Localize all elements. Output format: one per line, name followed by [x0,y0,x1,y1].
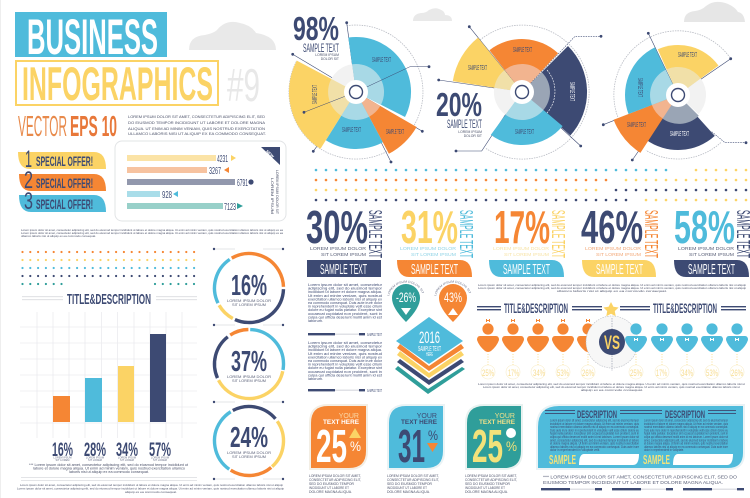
stat: 30%: SAMPLE TEXT [320,261,367,278]
fine print: top left: Lorem ipsum dolor sit amet, consectetur adipiscing elit, sed do eiusmod tempor incididunt ut labore et dolore magna aliqua. Ut enim ad minim veniam, quis nostrud exercitation ullamco laboris nisi ut aliquip ex ea [21,231,283,235]
card: blue 31: % [428,427,438,443]
panel: description: culpa qui officia deserunt mollit anim id est laborum. Lorem ipsum dolor sit [550,435,639,439]
panel: description: SAMPLE [549,452,576,467]
fine print: below stats [478,283,746,293]
chart footnote: labore et dolore magna aliqua. Ut enim ad minim veniam, quis nostrud exercitation ullamco [33,466,185,470]
heading: title and description left: TITLE&DESCRIPTION [504,301,568,316]
card: orange 25: 25 [316,420,347,472]
text column: laborum. [308,319,323,323]
text column: SAMPLE TEXT [367,388,382,393]
chart footnote: laboris nisi ut aliquip ex ea commodo consequat. [69,470,149,474]
card text 1: SED DO EIUSMOD TEMPOR [309,482,355,486]
card text 1: DOLORE MAGNA ALIQUA. [309,490,352,494]
title: infographics: INFOGRAPHICS [22,57,213,110]
text column: ea commodo consequat. Duis aute irure dolor [308,359,383,363]
bar chart: 34% [116,440,138,461]
ring: 24%: LOREM IPSUM DOLOR [227,451,271,455]
fine print: below stats: Lorem ipsum dolor sit amet, consectetur adipiscing elit, sed do eiusmod tempor incididunt ut labore et dolore magna aliqua. Ut enim ad minim veniam, quis nostrud exercitation ullamco laboris nisi ut aliquip [478,283,746,287]
pie 2 heading [436,86,482,138]
fine print: bottom left: Lorem ipsum dolor sit amet, consectetur adipiscing elit, sed do eiusmod tempor incididunt ut labore et dolore magna aliqua. Ut enim ad minim veniam, quis nostrud exercitation ullamco laboris nisi ut aliquip [20,483,283,487]
text column: exercitation ullamco laboris nisi ut aliquip ex [308,355,382,359]
stat: 30%: LOREM IPSUM DOLOR [310,246,366,251]
layered diamond: HERE [426,352,433,358]
orange figures row [477,319,599,379]
pie chart 2: SAMPLE TEXT [568,82,577,101]
text: SAMPLE TEXT [303,41,339,55]
dot rows: top right [316,170,750,200]
bar chart [20,312,197,462]
panel: description: dolor in reprehenderit in voluptate. [644,448,684,452]
card text 3: DOLORE MAGNA ALIQUA. [465,490,508,494]
special offers: 1 [25,146,32,173]
intro text: DO EIUSMOD TEMPOR INCIDIDUNT UT LABORE ET DOLORE MAGNA [128,121,266,125]
fine print: versus: Lorem ipsum dolor sit amet, consectetur adipiscing elit, sed do eiusmod tempor incididunt ut labore et dolore magna aliqua. Ut enim ad minim veniam, quis nostrud exercitation ullamco laboris nisi ut [478,382,745,386]
pie chart 2 [437,25,602,159]
fine print: bottom left [17,483,284,494]
text column: ea commodo consequat. Duis aute irure dolor [308,301,383,305]
text column: Ut enim ad minim veniam, quis nostrud [308,352,382,356]
heading: title and description left [477,301,602,316]
text: EPS 10 [70,111,117,143]
text column: incididunt ut labore et dolore magna aliqua. [308,290,382,294]
layered diamond: 2016 [419,328,440,347]
stat: 31%: 31% [401,201,458,253]
intro text: ULLAMCO LABORIS NISI UT ALIQUIP EX EA COMMODO CONSEQUAT. [128,132,266,136]
card text 2: DOLORE MAGNA ALIQUA. [387,490,430,494]
text column: in reprehenderit in voluptate velit esse cillum [308,305,382,309]
title: business: BUSINESS [27,9,158,65]
panel: description: dolor in reprehenderit in voluptate velit. [550,448,600,452]
description footnote: *** LOREM IPSUM DOLOR SIT AMET, CONSECTETUR ADIPISCING ELIT, SED DO [543,474,737,480]
fine print: below stats: ullamco laboris nisi ut aliquip ex ea commodo consequat. [557,289,667,293]
intro text: LOREM IPSUM DOLOR SIT AMET, CONSECTETUR ADIPISCING ELIT, SED [128,115,266,119]
special offers [18,146,106,215]
ring: 16% [202,241,296,335]
pie 1 heading: LOREM IPSUM [315,53,339,57]
card text 1: CONSECTETUR ADIPISCING ELIT, [309,478,361,482]
text column: occaecat cupidatat non proident, sunt in [308,312,382,316]
panel: horizontal bars: 7123 [224,202,236,213]
ring: 16%: 16% [231,270,267,302]
stat: 30%: 30% [306,201,368,253]
vs badge: VS [604,333,620,354]
text column: culpa qui officia deserunt mollit anim id est [308,373,382,377]
dot rows: left [22,252,197,284]
card: orange 25: YOUR [339,413,359,420]
panel: description: fugiat nulla pariatur. Excepteur sint occaecat cupidatat non proident, sunt in [550,432,639,436]
pie chart 3 [602,31,747,161]
text column: exercitation ullamco laboris nisi ut aliquip ex [308,297,382,301]
stat: 17% [489,201,568,278]
pie chart 3: SAMPLE TEXT [636,78,645,97]
text column [308,283,383,393]
card: blue 31: YOUR [417,413,437,420]
text column: culpa qui officia deserunt mollit anim id est [308,315,382,319]
fine print: versus: Lorem ipsum dolor sit amet, consectetur adipiscing elit, sed do eiusmod tempor incididunt ut labore et dolore magna aliqua. Ut enim ad minim veniam, quis nostrud exercitation ullamco laboris nisi ut [483,385,740,389]
pie chart 2: SAMPLE TEXT [513,45,532,54]
fine print: bottom left: aliquip ex ea commodo consequat. [125,490,177,494]
panel: horizontal bars: 3267 [209,166,221,177]
stat: 30%: SIT LOREM IPSUM [321,252,366,257]
panel: description: amet, consectetur adipiscing elit, sed do eiusmod tempor incididunt ut labore [550,438,639,442]
fine print: versus [478,382,745,392]
card: teal 25: YOUR [495,413,515,420]
special offers: 2 [24,167,33,194]
pie chart 2: SAMPLE TEXT [468,63,487,72]
card: teal 25 [466,405,522,472]
text column: in reprehenderit in voluptate velit esse cillum [308,363,382,367]
blue figures row: 53% [706,368,718,378]
card: teal 25: TEXT HERE [479,420,515,426]
pin: 43%: LOREM IPSUM DOLOR SIT [434,280,471,296]
pie 2 heading: DOLOR SIT [464,134,482,138]
bar chart: 28% [84,440,106,461]
ring: 37%: 37% [231,346,267,378]
card: teal 25: % [506,438,517,454]
card text 3: SED DO EIUSMOD TEMPOR [465,482,511,486]
fine print: below stats: Lorem ipsum dolor sit amet, consectetur adipiscing elit, sed do eiusmod tempor incididunt ut labore et dolore magna aliqua. Ut enim ad minim veniam, quis nostrud exercitation ullamco laboris nisi ut aliquip [478,286,746,290]
intro text [128,115,266,136]
description footnote: EIUSMOD TEMPOR INCIDIDUNT UT LABORE ET DOLORE MAGNA ALIQUA. [543,480,723,485]
card text 2: CONSECTETUR ADIPISCING ELIT, [387,478,439,482]
ring: 24% [200,392,298,490]
card text 3 [465,474,517,494]
blue figures row: 17% [656,368,667,378]
panel: description: incididunt ut labore et dolore magna aliqua. Ut enim ad minim veniam, quis [644,422,728,426]
icon: star [603,302,619,316]
orange figures row: 53% [557,368,569,378]
stat: 17%: LOREM IPSUM DOLOR [493,246,549,251]
text column: Ut enim ad minim veniam, quis nostrud [308,294,382,298]
panel: description: ullamco laboris nisi ut aliquip ex ea commodo consequat. Duis aute irure [644,445,728,449]
bar chart: SIT LOREM [88,458,102,462]
chart footnote [21,463,197,481]
background clouds [189,2,745,50]
panel: description: culpa qui officia deserunt mollit anim id est laborum. Lorem ipsum dolor sit [644,435,728,439]
ring: 16%: LOREM IPSUM DOLOR [227,299,271,303]
pie 2 heading: 20% [436,86,482,123]
pie 2 heading: LOREM IPSUM [458,130,482,134]
pie chart 2: SAMPLE TEXT [515,127,534,136]
stat: 31%: SAMPLE TEXT [456,210,476,258]
bar chart: SIT LOREM [153,458,167,462]
vs badge [586,316,638,371]
stat: 46%: 46% [581,201,643,253]
panel: horizontal bars: 6791 [237,178,248,189]
text column: Lorem ipsum dolor sit amet, consectetur [308,283,383,287]
pie chart 3: SAMPLE TEXT [670,129,689,138]
text column: dolore eu fugiat nulla pariatur. Excepteur sint [308,308,382,312]
text column: adipiscing elit, sed do eiusmod tempor [308,345,383,349]
pie chart 1: SAMPLE TEXT [342,125,361,134]
card text 3: INCIDIDUNT UT LABORE ET [465,486,505,490]
bar chart: LOREM IPSUM [151,456,169,460]
pin: -26%: -26% [396,289,416,305]
stat: 17%: SIT LOREM IPSUM [504,252,549,257]
orange figures row: 26% [582,368,594,378]
ring: 24%: SIT LOREM IPSUM [232,455,266,459]
pie 1 heading: DOLOR SIT [321,57,339,61]
panel: description: nostrud exercitation ullamco laboris nisi ut aliquip ex ea commodo consequat. [550,425,639,429]
stat: 31%: SIT LOREM IPSUM [411,252,456,257]
card text 3: LOREM IPSUM DOLOR SIT AMET, [465,474,517,478]
pie 1 heading [293,10,339,61]
card: blue 31: TEXT HERE [401,420,437,426]
title: infographics [16,57,218,110]
card text 1: LOREM IPSUM DOLOR SIT AMET, [309,474,361,478]
stat: 31%: SAMPLE TEXT [411,261,458,278]
fine print: versus: aliquip ex ea commodo consequat. [581,388,643,392]
heading: chart title: TITLE&DESCRIPTION [67,291,151,308]
card text 2: SED DO EIUSMOD TEMPOR [387,482,433,486]
description footnote [541,474,744,490]
card: blue 31 [388,405,444,472]
card text 1 [309,474,361,494]
stat: 31%: LOREM IPSUM DOLOR [400,246,456,251]
number tag: #9 [227,59,260,111]
pie chart 1: SAMPLE TEXT [310,85,319,104]
fine print: top left: ullamco laboris nisi ut aliquip ex ea commodo consequat. [21,234,96,238]
panel: description: et dolore magna aliqua. Ut enim ad minim veniam, quis nostrud exercitation [550,442,639,446]
card text 2 [387,474,439,494]
intro text: ALIQUA. UT ENIM AD MINIM VENIAM, QUIS NOSTRUD EXERCITATION [128,127,266,131]
title: business [15,9,167,65]
stat: 46%: SAMPLE TEXT [641,210,661,258]
text column: dolore eu fugiat nulla pariatur. Excepteur sint [308,366,382,370]
card: orange 25: TEXT HERE [323,420,359,426]
stat: 58%: LOREM IPSUM DOLOR [678,246,734,251]
bar chart: LOREM IPSUM [53,456,72,460]
panel: description: DESCRIPTION [577,409,617,421]
orange figures row: 34% [533,368,545,378]
pin: 43% [434,280,471,322]
text column: adipiscing elit, sed do eiusmod tempor [308,287,383,291]
ring: 16%: SIT LOREM IPSUM [232,303,266,307]
blue figures row: 25% [630,368,642,378]
pin: 43%: 43% [444,289,462,305]
pie chart 1: SAMPLE TEXT [372,55,391,64]
card text 1: INCIDIDUNT UT LABORE ET [309,486,349,490]
pie 1 heading: 98% [293,10,339,47]
layered diamond [395,317,465,394]
bar chart: 16% [52,440,73,461]
bar chart: LOREM IPSUM [86,456,104,460]
chart footnote: *** Lorem ipsum dolor sit amet, consectetur adipiscing elit, sed do eiusmod tempor incididunt ut [29,463,188,467]
layered diamond: SAMPLE TEXT [418,346,441,353]
stat: 17%: SAMPLE TEXT [548,210,568,258]
card: orange 25: % [350,438,361,454]
stat: 31% [397,201,476,278]
stat: 46% [581,201,661,278]
special offers: SPECIAL OFFER! [36,196,93,212]
fine print: top left: Lorem ipsum dolor sit amet, consectetur adipiscing elit, sed do eiusmod tempor incididunt ut labore et dolore magna aliqua. Ut enim ad minim veniam, quis nostrud exercitation ullamco laboris nisi ut aliquip ex ea [21,228,283,232]
blue figures row [625,323,748,379]
text: SAMPLE TEXT [447,117,482,131]
ring: 24%: 24% [230,422,268,454]
stat: 17%: SAMPLE TEXT [503,261,550,278]
ring: 37%: SIT LOREM IPSUM [232,379,266,383]
ring: 37%: LOREM IPSUM DOLOR [227,375,271,379]
fine print: top left [21,228,283,238]
panel: horizontal bars [115,141,286,221]
stat: 46%: SIT LOREM IPSUM [596,252,641,257]
blue figures row: 34% [681,368,693,378]
bar chart: 57% [149,440,171,461]
bar chart: SIT LOREM [120,458,134,462]
orange figures row: 17% [508,368,519,378]
panel: horizontal bars: 928 [162,190,172,201]
panel: description: SAMPLE [643,452,670,467]
bar chart: SIT LOREM [56,458,69,462]
card text 2: INCIDIDUNT UT LABORE ET [387,486,427,490]
special offers: 3 [24,188,33,215]
pie chart 1 [289,21,430,163]
panel: description: Lorem ipsum dolor sit amet, consectetur adipiscing elit, sed do eiusmod tempor [550,418,640,422]
card: blue 31: 31 [398,420,425,472]
panel: horizontal bars: NEW [265,149,275,159]
orange figures row: 25% [482,368,494,378]
panel: horizontal bars: 4231 [217,154,228,165]
text column: SAMPLE TEXT [367,332,382,337]
panel: description: ullamco laboris nisi ut aliquip ex ea commodo consequat. Duis aute irure [550,445,639,449]
text column: laborum. [308,377,323,381]
text column: occaecat cupidatat non proident, sunt in [308,370,382,374]
stat: 30% [306,201,385,278]
special offers: SPECIAL OFFER! [36,153,93,169]
stat: 30%: SAMPLE TEXT [365,210,385,258]
pie chart 1: SAMPLE TEXT [386,127,404,136]
text column: Lorem ipsum dolor sit amet, consectetur [308,341,383,345]
pin: -26%: LOREM IPSUM DOLOR SIT [387,280,424,296]
panel: description [537,405,744,469]
stat: 58% [674,201,750,278]
stat: 46%: SAMPLE TEXT [596,261,643,278]
pie chart 3: SAMPLE TEXT [678,50,697,59]
pin: -26% [387,280,424,322]
panel: description: Duis aute irure dolor in reprehenderit in voluptate velit esse cillum dolore eu [550,428,639,432]
pie chart 3: SAMPLE TEXT [627,120,646,129]
card text 2: LOREM IPSUM DOLOR SIT AMET, [387,474,439,478]
ring: 37% [201,316,297,412]
special offers: SPECIAL OFFER! [36,175,93,191]
panel: description: DESCRIPTION [665,409,705,421]
card: teal 25: 25 [472,420,503,472]
subtitle: VECTOR [18,111,67,143]
bar chart: LOREM IPSUM [118,456,136,460]
card: orange 25 [310,405,367,472]
blue figures row: 26% [731,368,743,378]
card text 3: CONSECTETUR ADIPISCING ELIT, [465,478,517,482]
stat: 58%: SIT LOREM IPSUM [689,252,734,257]
panel: horizontal bars: LOREM IPSUM [270,178,274,214]
fine print: bottom left: Lorem ipsum dolor sit amet, consectetur adipiscing elit, sed do eiusmod tempor incididunt ut labore et dolore magna aliqua. Ut enim ad minim veniam, quis nostrud exercitation ullamco laboris nisi ut aliquip [17,486,284,490]
stat: 46%: LOREM IPSUM DOLOR [585,246,641,251]
panel: description: incididunt ut labore et dolore magna aliqua. Ut enim ad minim veniam, quis [550,422,639,426]
text column: incididunt ut labore et dolore magna aliqua. [308,348,382,352]
panel: horizontal bars: LOREM IPSUM DOLOR SIT [275,170,279,215]
stat: 17%: 17% [494,201,550,253]
